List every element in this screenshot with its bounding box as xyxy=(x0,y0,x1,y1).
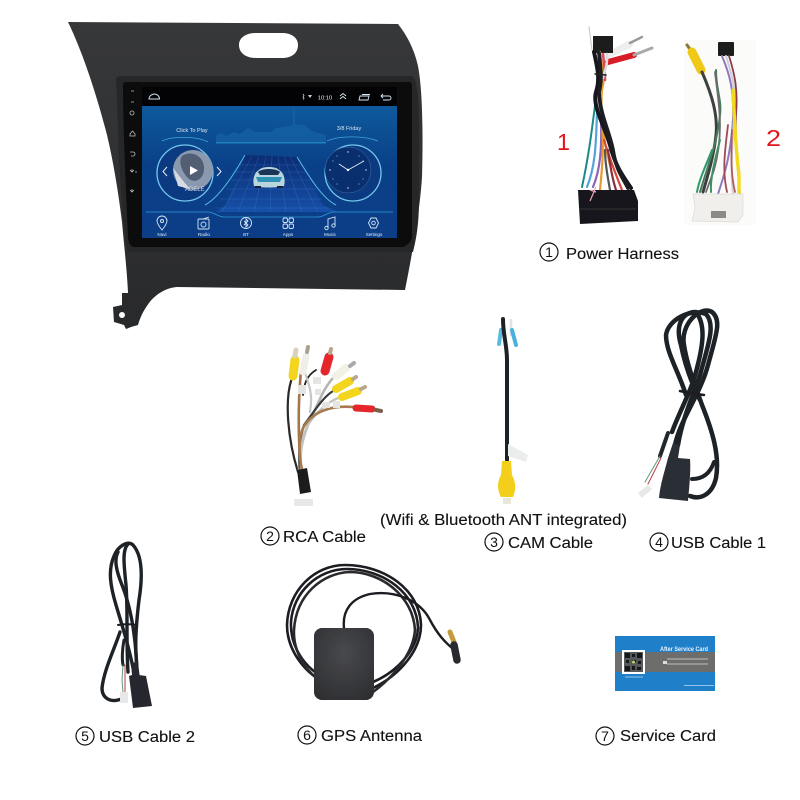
label: service card: Service Card xyxy=(620,728,716,745)
media title: Click To Play xyxy=(176,128,208,134)
top connector xyxy=(593,36,613,53)
icon: music: Music xyxy=(324,232,337,237)
icon: bluetooth xyxy=(240,218,252,237)
label: USB cable 2: USB Cable 2 xyxy=(99,729,195,746)
icon: radio xyxy=(198,217,210,237)
icon: navi: Navi xyxy=(157,232,167,237)
label: RCA cable: 2 xyxy=(266,528,274,544)
USB connector xyxy=(659,443,690,501)
label: power harness xyxy=(540,243,679,263)
wire bundle xyxy=(582,52,631,190)
label: GPS antenna: 6 xyxy=(303,727,311,743)
wire tail xyxy=(120,665,128,703)
label: USB cable 2: 5 xyxy=(81,728,89,744)
USB cable 2 xyxy=(102,543,152,708)
label: power harness: Power Harness xyxy=(566,246,679,263)
label: service card: 7 xyxy=(601,728,609,744)
antenna puck xyxy=(314,628,374,700)
USB connector xyxy=(129,662,152,708)
grey band xyxy=(615,652,715,672)
icon: settings: Settings xyxy=(366,232,383,237)
SMA connector xyxy=(450,632,457,660)
panel: touchscreen xyxy=(142,87,397,238)
label: CAM cable: CAM Cable xyxy=(508,535,593,552)
panel: dash fascia xyxy=(68,22,423,329)
power harness 2 xyxy=(684,40,756,225)
white connector xyxy=(692,194,743,222)
skyline xyxy=(216,106,326,143)
tag labels xyxy=(298,377,340,408)
car stereo dash panel xyxy=(68,22,423,329)
base connector xyxy=(294,499,313,506)
yellow RCA plug xyxy=(687,45,716,192)
cable loops xyxy=(287,565,452,692)
cable tie xyxy=(118,623,137,626)
backing xyxy=(684,40,756,225)
icon: music xyxy=(324,217,337,237)
white tail xyxy=(510,320,512,335)
label: USB cable 1 xyxy=(650,533,766,552)
car illustration xyxy=(253,167,285,188)
label: RCA cable xyxy=(261,527,366,546)
mounting bracket hole xyxy=(119,312,125,318)
plug: white xyxy=(303,347,308,372)
footer text xyxy=(625,677,714,686)
label: RCA cable: RCA Cable xyxy=(283,529,366,546)
card title: After Service Card xyxy=(660,646,708,653)
harness number 1: 1 xyxy=(557,129,570,155)
power harness 1 xyxy=(578,27,652,224)
cable tag xyxy=(508,444,528,462)
plug tip xyxy=(503,498,511,504)
coil loops xyxy=(102,543,141,700)
label: USB cable 1: 4 xyxy=(655,534,663,550)
QR code xyxy=(622,650,645,674)
left media dial xyxy=(157,137,221,201)
coil loops xyxy=(666,311,717,497)
CAM cable xyxy=(498,319,528,504)
status bar xyxy=(149,94,391,102)
plug: yellow xyxy=(293,350,296,376)
icon: apps xyxy=(283,218,294,237)
plug: yellow 3 xyxy=(342,387,365,397)
label: CAM cable xyxy=(485,533,593,552)
label: power harness: 1 xyxy=(545,244,553,260)
label: CAM cable: 3 xyxy=(490,534,498,550)
label: USB cable 1: USB Cable 1 xyxy=(671,535,766,552)
icon: bluetooth: BT xyxy=(243,232,249,237)
GPS antenna xyxy=(287,565,457,700)
icon: radio: Radio xyxy=(198,232,210,237)
wires xyxy=(288,370,353,472)
harness number 2: 2 xyxy=(766,125,781,151)
base bundle xyxy=(297,468,311,494)
label: GPS antenna xyxy=(298,726,422,745)
USB cable 1 xyxy=(638,311,717,501)
icon: settings xyxy=(366,218,383,237)
plug: red 2 xyxy=(356,408,381,411)
status bar: 10:10 xyxy=(318,96,332,102)
plug: yellow 2 xyxy=(336,377,356,389)
icons: side buttons xyxy=(130,91,137,192)
icon: apps: Apps xyxy=(283,232,294,237)
blue terminals xyxy=(499,330,516,345)
plug: red xyxy=(325,349,331,371)
left media dial: ADELE xyxy=(185,187,205,193)
panel: gloss bezel frame xyxy=(123,82,412,247)
cable tie xyxy=(680,391,704,395)
wires xyxy=(697,56,740,195)
black cable xyxy=(503,319,507,460)
yellow plug xyxy=(498,461,515,497)
label: GPS antenna: GPS Antenna xyxy=(321,728,422,745)
bottom connector xyxy=(578,190,638,224)
clock date: 3/8 Friday xyxy=(337,126,361,132)
right clock dial xyxy=(325,137,381,201)
bottom nav icons xyxy=(157,216,383,237)
label: USB cable 2 xyxy=(76,727,195,746)
card background xyxy=(615,636,715,691)
panel: raised bezel xyxy=(116,76,419,252)
plug: white 2 xyxy=(336,363,354,376)
perspective road grid xyxy=(146,155,393,217)
wire tail xyxy=(638,433,668,498)
RCA plugs xyxy=(589,27,652,62)
RCA cable xyxy=(288,347,381,506)
icon: navi xyxy=(157,216,167,237)
wifi note: (Wifi & Bluetooth ANT integrated) xyxy=(380,512,627,529)
top connector xyxy=(718,42,734,56)
contact lines xyxy=(663,659,708,664)
service card xyxy=(615,636,715,691)
